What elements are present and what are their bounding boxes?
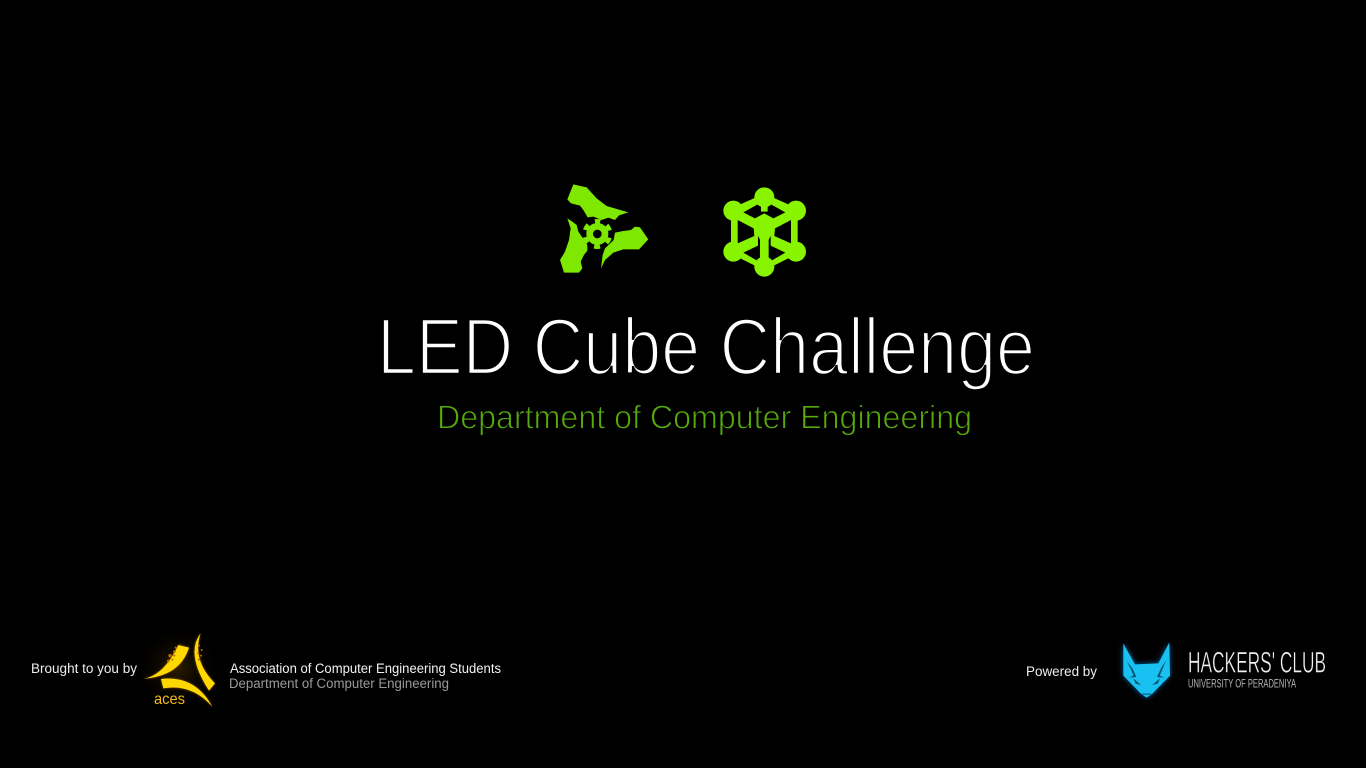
- subtitle: Department of Computer Engineering: [437, 400, 972, 436]
- logo: hackers club fox: [1123, 642, 1170, 698]
- association department: Department of Computer Engineering: [229, 676, 449, 691]
- logo text: university of peradeniya: UNIVERSITY OF PERADENIYA: [1188, 676, 1296, 690]
- icon: LED cube: [723, 187, 806, 277]
- credit: powered by: Powered by: [1026, 664, 1097, 679]
- icon: gear with three blades: [560, 184, 648, 273]
- logo: aces: [134, 624, 222, 712]
- title: LED Cube Challenge: [377, 302, 1035, 391]
- credit: brought to you by: Brought to you by: [31, 661, 137, 676]
- association name: Association of Computer Engineering Students: [230, 661, 501, 676]
- logo text: aces: aces: [154, 691, 185, 708]
